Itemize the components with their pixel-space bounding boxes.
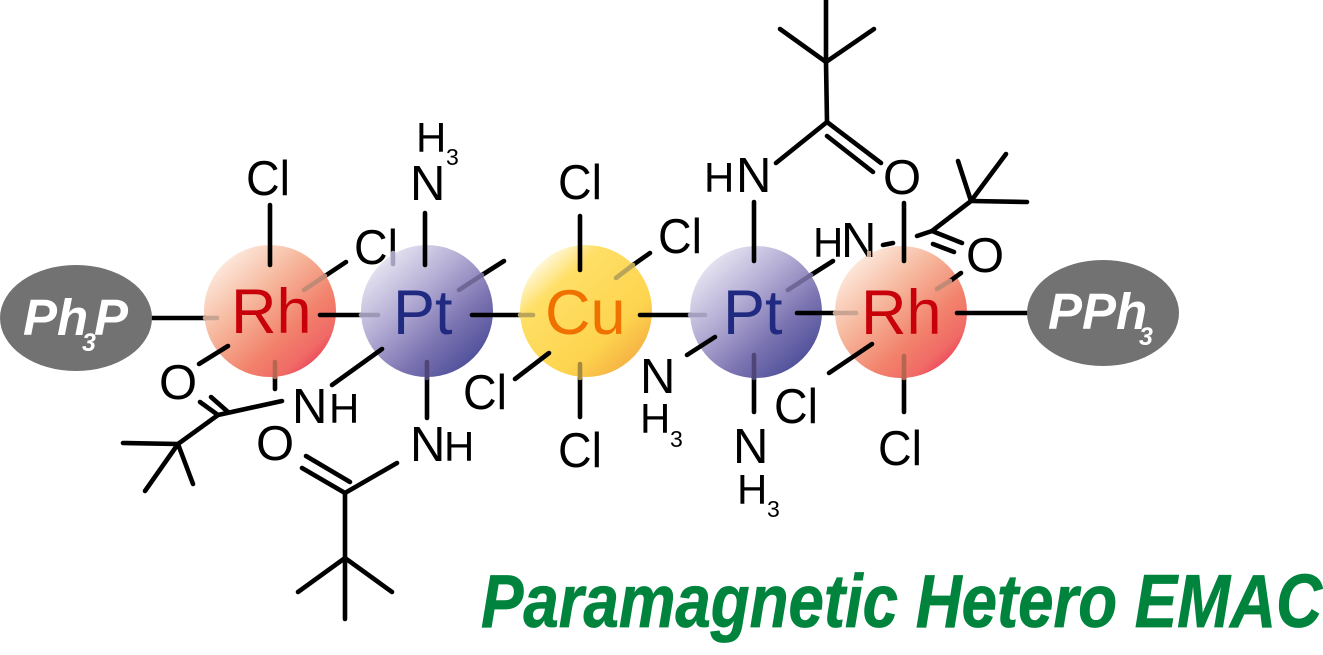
ligand: PPh3 — [1027, 260, 1179, 366]
pivalamide group: top — [776, 0, 881, 172]
metal label: Cu: Cu — [545, 278, 626, 348]
metal label: Rh left: Rh — [231, 277, 312, 347]
ligand: Ph3P: P — [94, 289, 129, 346]
atom labels: H — [640, 395, 670, 442]
sphere: copper centre — [520, 245, 652, 377]
dimmed bond segments inside spheres — [205, 253, 950, 378]
atom labels: Cl — [878, 422, 922, 476]
atom labels: Cl — [558, 424, 602, 478]
pivalamide group: bottom-left — [123, 397, 282, 491]
atom labels: H — [813, 219, 843, 266]
atom labels: N — [841, 214, 876, 268]
atom labels: N — [640, 350, 675, 404]
atom labels: H — [444, 423, 474, 470]
atom labels: H — [704, 154, 734, 201]
atom labels — [159, 114, 1004, 522]
metal label: Rh right: Rh — [861, 278, 942, 348]
atom labels: N — [410, 157, 445, 211]
ligand: PPh3: PPh — [1048, 283, 1147, 340]
atom labels: O — [966, 229, 1004, 283]
atom labels: H — [416, 114, 446, 161]
atom labels: Cl — [558, 156, 602, 210]
sphere: platinum right — [690, 246, 822, 378]
atom labels: Cl — [658, 210, 702, 264]
atom labels: N — [733, 420, 768, 474]
atom labels: O — [883, 151, 921, 205]
atom labels: N — [292, 380, 327, 434]
dimmed N foot over rhodium sphere — [867, 251, 871, 257]
ligand: PPh3: 3 — [1139, 323, 1153, 351]
atom labels: 3 — [767, 496, 780, 522]
atom labels: 3 — [670, 426, 683, 452]
atom labels: H — [329, 385, 359, 432]
atom labels: N — [410, 418, 445, 472]
atom labels: O — [159, 356, 197, 410]
metal label: Pt right: Pt — [723, 278, 783, 348]
atom labels: N — [736, 149, 771, 203]
sphere: rhodium left — [204, 245, 336, 377]
Cl label clipped by platinum sphere: Cl — [354, 221, 398, 275]
atom labels: O — [256, 417, 294, 471]
atom labels: H — [737, 466, 767, 513]
bonds — [152, 202, 1027, 418]
metal label: Pt left: Pt — [393, 278, 453, 348]
ligand: Ph3P — [0, 265, 152, 371]
ligand: Ph3P: Ph — [23, 289, 88, 346]
sphere: platinum left — [361, 245, 493, 377]
atom labels: 3 — [446, 144, 459, 170]
pivalamide group: bottom — [298, 456, 397, 619]
atom labels: Cl — [246, 152, 290, 206]
pivalamide group: right — [917, 154, 1027, 252]
sphere: rhodium right — [835, 246, 967, 378]
atom labels: Cl — [463, 366, 507, 420]
atom labels: Cl — [774, 380, 818, 434]
ligand: Ph3P: 3 — [82, 329, 96, 357]
